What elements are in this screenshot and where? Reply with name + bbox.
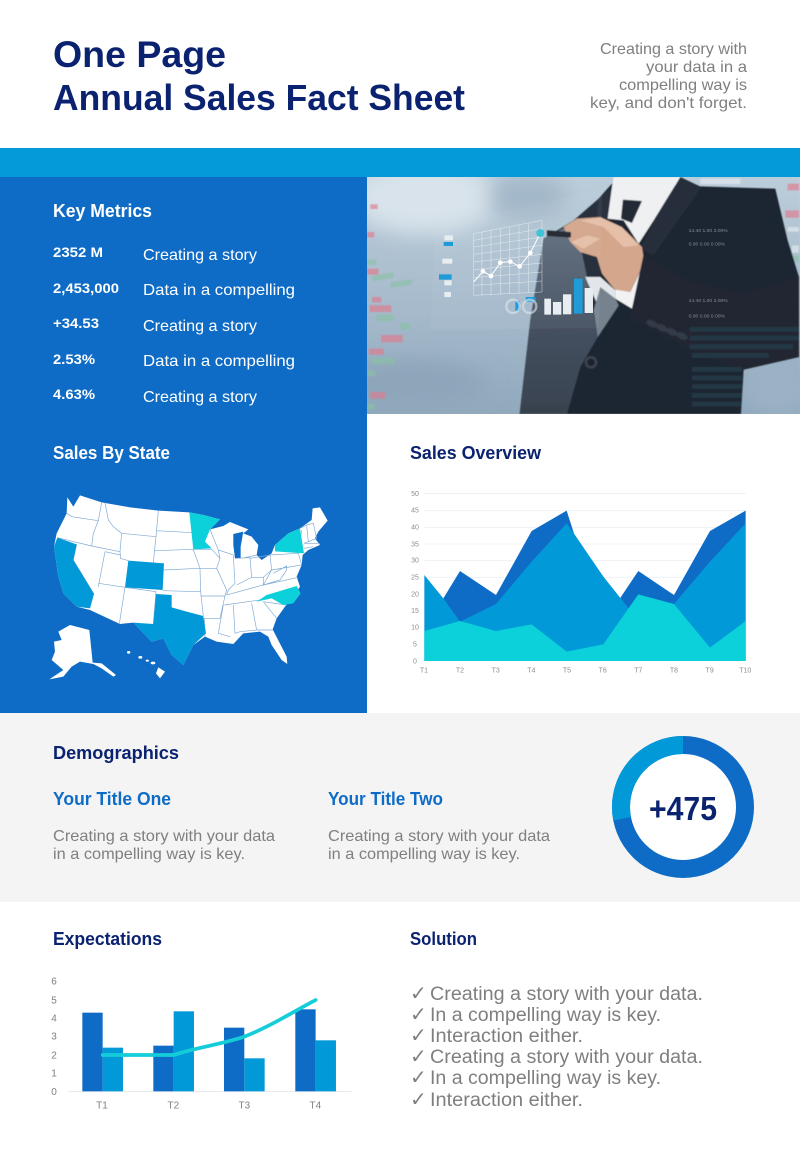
combo chart: expectations: 6 — [51, 977, 57, 988]
photo: businessman drawing on a transparent chart: 14.40 1.00 3.00% — [689, 228, 728, 234]
column: your title two: Your Title Two — [328, 789, 443, 809]
area chart: sales overview: 30 — [411, 558, 419, 565]
photo: businessman drawing on a transparent chart: 14.40 1.00 3.00% — [689, 298, 728, 304]
column: your title one — [53, 789, 275, 863]
heading: sales by state: Sales By State — [53, 443, 170, 463]
combo chart: expectations: T4 — [309, 1101, 322, 1112]
checklist: solution: Interaction either. — [430, 1026, 583, 1047]
heading: sales overview: Sales Overview — [410, 443, 542, 463]
heading: solution: Solution — [410, 929, 477, 949]
combo chart: expectations: 1 — [51, 1068, 57, 1079]
column: your title two: in a compelling way is key. — [328, 846, 520, 863]
combo chart: expectations: 0 — [51, 1087, 57, 1098]
intro text: your data in a — [646, 59, 747, 76]
key metrics list: 4.63% — [53, 386, 96, 402]
area chart: sales overview: T1 — [420, 668, 428, 675]
column: your title two: Creating a story with your data — [328, 828, 550, 845]
column: your title one: in a compelling way is key. — [53, 846, 245, 863]
key metrics list: 2352 M — [53, 244, 103, 260]
area chart: sales overview: T2 — [456, 668, 464, 675]
key metrics list — [53, 244, 295, 406]
key metrics list: Creating a story — [143, 318, 257, 335]
suit — [520, 184, 799, 414]
holographic panel — [548, 196, 602, 313]
teal stripes over jacket — [690, 327, 799, 406]
intro text: key, and don't forget. — [590, 95, 747, 112]
checklist: solution: In a compelling way is key. — [430, 1068, 661, 1089]
area chart: sales overview: T7 — [634, 668, 642, 675]
heading: expectations: Expectations — [53, 929, 162, 949]
intro text: compelling way is — [619, 77, 747, 94]
checklist: solution: In a compelling way is key. — [430, 1005, 661, 1026]
area chart: sales overview: T10 — [739, 668, 751, 675]
donut chart: +475: +475 — [649, 790, 717, 827]
intro text — [590, 41, 747, 112]
photo: businessman drawing on a transparent chart — [367, 177, 800, 414]
area chart: sales overview: T4 — [527, 668, 536, 675]
area chart: sales overview: T8 — [670, 668, 678, 675]
area chart: sales overview: 40 — [411, 524, 419, 531]
combo chart: expectations: 4 — [51, 1014, 57, 1025]
key metrics list: 2,453,000 — [53, 280, 119, 296]
checklist: solution: ✓ — [410, 1065, 427, 1089]
alaska — [49, 625, 116, 679]
combo chart: expectations: 5 — [51, 995, 57, 1006]
photo: businessman drawing on a transparent chart: 0.00 0.00 0.00% — [689, 314, 726, 320]
key metrics list: Creating a story — [143, 247, 257, 264]
checklist: solution: Creating a story with your data. — [430, 984, 703, 1005]
area chart: sales overview: 15 — [411, 608, 419, 615]
area chart: sales overview: 25 — [411, 575, 419, 582]
area chart: sales overview: T3 — [492, 668, 500, 675]
photo: businessman drawing on a transparent chart: 0.00 0.00 0.00% — [689, 241, 726, 247]
sleeve edge and buttons — [629, 254, 799, 370]
map: USA sales by state — [49, 495, 328, 679]
key metrics list: Data in a compelling — [143, 353, 295, 370]
donut chart: +475 — [621, 745, 745, 869]
area chart: sales overview: 0 — [413, 658, 417, 665]
combo chart: expectations: 3 — [51, 1032, 57, 1043]
column: your title two — [328, 789, 550, 863]
title — [53, 34, 465, 118]
checklist: solution: Creating a story with your data. — [430, 1047, 703, 1068]
checklist: solution: Interaction either. — [430, 1090, 583, 1111]
area chart: sales overview: 50 — [411, 491, 419, 498]
heading: demographics: Demographics — [53, 743, 179, 763]
area chart: sales overview: T6 — [599, 668, 607, 675]
combo chart: expectations — [51, 977, 352, 1112]
heading: key metrics: Key Metrics — [53, 201, 152, 221]
pen — [547, 230, 571, 238]
intro text: Creating a story with — [600, 41, 747, 58]
area chart: sales overview: T5 — [563, 668, 571, 675]
checklist: solution: ✓ — [410, 1087, 427, 1111]
area chart: sales overview: 5 — [413, 642, 417, 649]
combo chart: expectations: T1 — [96, 1101, 108, 1112]
combo chart: expectations: T2 — [167, 1101, 180, 1112]
checklist: solution: ✓ — [410, 1044, 427, 1068]
shirt and tie — [608, 177, 680, 244]
area chart: sales overview — [411, 491, 751, 675]
panel: demographics — [0, 713, 800, 902]
title: Annual Sales Fact Sheet — [53, 77, 465, 118]
combo chart: expectations: T3 — [238, 1101, 251, 1112]
title: One Page — [53, 34, 226, 75]
checklist: solution: ✓ — [410, 1002, 427, 1026]
key metrics list: Data in a compelling — [143, 282, 295, 299]
area chart: sales overview: 35 — [411, 541, 419, 548]
hawaii — [127, 651, 165, 678]
key metrics list: Creating a story — [143, 389, 257, 406]
area chart: sales overview: T9 — [706, 668, 714, 675]
key metrics list: 2.53% — [53, 351, 96, 367]
header band — [0, 148, 800, 177]
area chart: sales overview: 45 — [411, 508, 419, 515]
checklist: solution: ✓ — [410, 981, 427, 1005]
column: your title one: Creating a story with your data — [53, 828, 275, 845]
key metrics list: +34.53 — [53, 315, 99, 331]
area chart: sales overview: 20 — [411, 591, 419, 598]
panel: key metrics and state map background — [0, 177, 367, 713]
checklist: solution: ✓ — [410, 1023, 427, 1047]
checklist: solution — [410, 981, 703, 1111]
area chart: sales overview: 10 — [411, 625, 419, 632]
hand — [564, 217, 644, 292]
column: your title one: Your Title One — [53, 789, 171, 809]
lapel — [640, 177, 701, 255]
combo chart: expectations: 2 — [51, 1050, 57, 1061]
